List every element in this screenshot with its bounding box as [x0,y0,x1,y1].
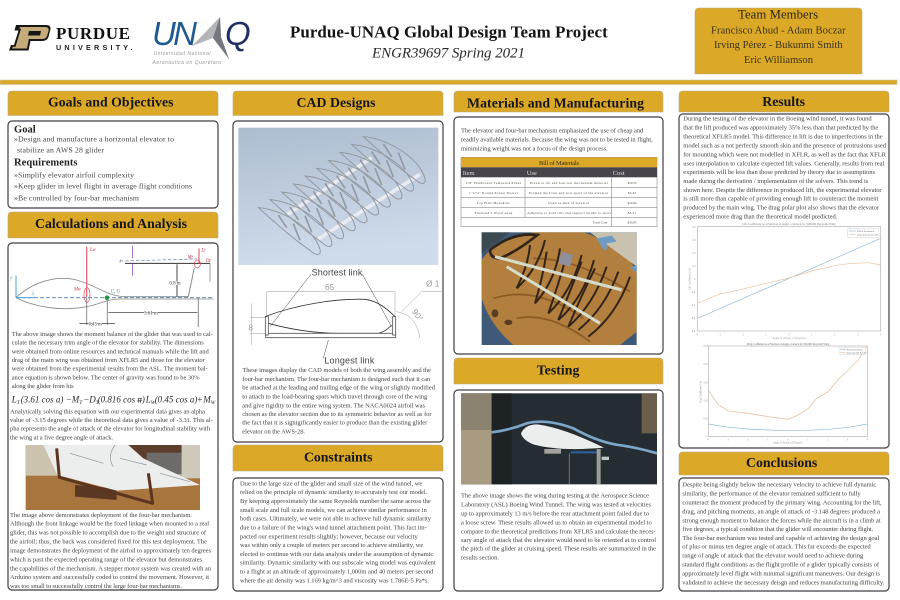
chart: lift coefficient vs angle of attack: 0.6 [692,239,696,242]
chart: drag coefficient vs angle of attack: Drag Coefficient as a Function of Angle of Attack for 500,000 Reynolds Wing [747,342,830,347]
text: testing description [461,493,656,562]
chart: lift coefficient vs angle of attack: -0.4 [691,304,696,307]
text: four-bar deployment description [10,512,212,590]
equation: T [96,400,100,406]
text: conclusions description: five degrees, a typical condition that the glider will encounter during flight. [682,526,874,533]
text: constraints description: elected to continue with our data analysis under the assumption of dynamic [240,551,433,558]
diagram: glider moment balance: Lw [89,248,97,253]
text: results description: that the lift produced was approximately 35% less than that predicted by the [683,125,878,132]
heading: materials and manufacturing: Materials and Manufacturing [467,96,644,110]
diagram: glider moment balance: x̂ [31,292,35,297]
equation: M [71,394,80,404]
text: CAD description: These images display the CAD models of both the wing assembly and the [242,367,431,374]
logo: UNAQ: UN [152,15,197,52]
heading: calculations and analysis: Calculations and Analysis [35,216,188,231]
text: constraints description [240,480,436,585]
text: results description: produced by the main wing. The drag polar plot also shows that the elevator [683,205,880,212]
chart: drag coefficient vs angle of attack: XFLR Prediction [847,349,864,352]
text: constraints description: By keeping approximately the same Reynolds number the same across the [240,498,431,505]
text: four-bar deployment description: image demonstrates the deployment of the airfoil to approximately ten degrees [10,547,211,554]
chart: lift coefficient vs angle of attack: 1 [811,333,813,336]
chart: lift coefficient vs angle of attack: 0.8 [692,226,696,229]
text: results description: is still more than capable of providing enough lift to counteract the moment [683,196,878,203]
chart: lift coefficient vs angle of attack: -4 [696,333,699,336]
text: results description: shown here. Despite the difference in produced lift, the experimental elevator [683,187,882,194]
panel: goals [8,121,218,208]
text: testing description: The above image shows the wing during testing at the Aerospace Science [461,493,649,500]
panel: team members [695,8,862,74]
heading: CAD designs [233,91,443,116]
diagram: glider moment balance: Lt [200,249,206,254]
text: constraints description: to a flight at an altitude of approximately 1,000m and 40 meters per second [240,569,434,576]
text: moment balance description [12,331,213,390]
text: conclusions description: counteract the moment produced by the primary wing. Accounting for the lift, [682,499,882,506]
table: bill of materials: Elevator rib and four-bar mechanism material [530,181,608,185]
requirements list: »Be controlled by four-bar mechanism [14,194,139,202]
chart: drag coefficient vs angle of attack: -2 [747,439,750,442]
text: constraints description: small scale and full scale models, we can achieve similar performance in [240,507,427,514]
chart: lift coefficient vs angle of attack: Angle of Attack, α (Degrees) [772,337,806,340]
diagram: glider moment balance: ŷ [9,277,13,282]
text: testing description: Laboratory (ASL) Boeing Wind Tunnel. The wing was tested at velocities [461,502,651,509]
text: four-bar deployment description: glider, this was not possible to accomplish due to the weight and structure of [10,530,207,537]
chart: drag coefficient vs angle of attack: Drag Coefficient (Cd) [700,381,703,403]
panel: results [679,114,889,448]
text: testing description: compare to the theoretical predictions from XFLR5 and calculate the neces- [461,528,656,535]
text: conclusions description: drag, and pitching moments, an angle of attack of -3.148 degrees produced a [682,508,880,515]
chart: lift coefficient vs angle of attack: -0.8 [691,330,696,333]
chart: drag coefficient vs angle of attack [700,342,869,445]
chart: drag coefficient vs angle of attack: 0.03 [704,381,709,384]
table: bill of materials [461,157,657,227]
text: conclusions description: of plus or minus ten degree angle of attack. This far exceeds the expected [682,544,871,551]
photo: four-bar mechanism deployed [26,445,200,510]
chart: lift coefficient vs angle of attack: 2 [834,333,836,336]
requirements list [14,170,192,202]
text: results description: model such as a not perfectly smooth skin and the presence of protrusions used [683,143,887,150]
text: four-bar deployment description: was too small to successfully control the large four-bar mechanisms. [10,583,182,590]
diagram: glider moment balance [9,246,213,327]
image: four-bar mechanism drawing: 65 [325,282,335,292]
diagram: glider moment balance: 3.61 m [144,312,158,317]
text: CAD description: be attached at the leading and trailing edge of the wing or slightly modified [242,385,436,392]
chart: lift coefficient vs angle of attack: XFLR Prediction [857,230,875,233]
diagram: glider moment balance: 0.8 m [169,281,181,286]
text: materials description: readily available materials. Because the wing was not to be tested in flight, [461,136,653,143]
table: bill of materials: Item [463,170,475,177]
table: bill of materials: $5.31 [628,211,636,215]
heading: results: Results [762,94,806,109]
text: testing description: up to approximately 13 m/s before the rear attachment point failed due to [461,511,649,518]
heading: conclusions: Conclusions [746,455,818,470]
chart: lift coefficient vs angle of attack: Lift Coefficient as a Function of Angle of Attack for 500,000 Reynolds Wing [742,222,836,227]
requirements heading: Requirements [14,158,78,168]
chart: lift coefficient vs angle of attack: 4 [880,333,882,336]
text: analytical solution: value of -3.15 degrees while the theoretical data gives a value of -3.31. This al- [10,417,213,424]
equation: W [211,400,216,406]
chart: lift coefficient vs angle of attack: -1 [764,333,767,336]
text: constraints description: pacted our experiment results slightly; however, because our velocity [240,533,418,540]
table: bill of materials: 1"x72" Round Poplar Dowel [469,191,518,195]
text: CAD description: four-bar mechanism. The four-bar mechanism is designed such that it can [242,376,431,383]
panel: conclusions [679,478,889,591]
logo: UNAQ: Q [225,15,251,52]
text: moment balance description: drag of the main wing was obtained from XFLR5 and those for the elevator [12,357,206,364]
goal text: stabilize an AWS 28 glider [17,146,104,154]
text: constraints description: similarity. Dynamic similarity with our subscale wing model was equivalent [240,560,436,567]
image: four-bar mechanism drawing: 8 [248,323,253,333]
table: bill of materials: Used as skin of elevator [548,201,590,205]
text: constraints description: relied on the principle of dynamic similarity to accurately test our model. [240,489,428,496]
equation: T [17,400,21,406]
logo: UNAQ: Universidad Nacional [154,51,211,57]
equation: + [197,394,203,404]
equation: W [151,400,156,406]
table: bill of materials: Top Flite Monokote [477,201,510,205]
equation: − [66,394,72,404]
chart: drag coefficient vs angle of attack: 1 [807,439,809,442]
chart: drag coefficient vs angle of attack: 0.04 [704,363,709,366]
heading: results [679,91,889,112]
text: conclusions description [682,482,885,586]
image: four-bar mechanism drawing: Shortest link [312,268,363,278]
text: results description: experiments will be less than those predicted by theory due to assumptions [683,169,875,176]
table: bill of materials: Adhesive to hold ribs and support beams to spars [527,211,612,215]
panel: team members: Eric Williamson [744,55,814,66]
heading: testing [454,358,663,384]
requirements list: »Keep glider in level flight in average flight conditions [14,182,192,190]
text: results description: experienced more drag than the theoretical model predicted. [683,213,838,220]
text: four-bar deployment description: Arduino system and successfully coded to control the movement. However, it [10,574,209,581]
table: bill of materials: Total Cost [593,220,607,224]
panel: materials and manufacturing [454,117,663,354]
image: four-bar mechanism drawing: Longest link [324,355,375,365]
heading: goals and objectives: Goals and Objectives [48,94,174,110]
requirements list: »Simplify elevator airfoil complexity [14,170,134,180]
chart: lift coefficient vs angle of attack: 0.2 [692,265,696,268]
logo: UNAQ [152,15,251,66]
logo: Purdue University: PURDUE [56,24,130,43]
image: four-bar mechanism drawing [248,268,442,365]
header: logos and title [9,15,608,66]
subtitle: ENGR39697 Spring 2021 [371,46,525,62]
text: conclusions description: validated to achieve the necessary deisgn and reduces manufacturing difficulty. [682,579,885,586]
text: materials description: minimizing weight was not a focus of the design process. [461,145,608,152]
text: results description: made during the derivation / implementation of the solvers. This trend is [683,178,869,185]
text: moment balance description: were obtained from the experimental results from the ASL. The moment bal- [12,366,208,373]
heading: testing: Testing [537,362,579,378]
heading: conclusions [679,452,889,475]
text: testing description: a loose screw. These results allowed us to obtain an experimental model to [461,519,652,526]
image: wing assembly CAD model [238,128,438,265]
heading: CAD designs: CAD Designs [296,95,376,110]
text: four-bar deployment description: the capabilities of the mechanism. A stepper motor system was created with an [10,565,212,572]
text: results description [683,116,887,220]
chart: lift coefficient vs angle of attack: -3 [719,333,722,336]
chart: drag coefficient vs angle of attack: 0.05 [704,345,709,348]
text: moment balance description: along the glider from his [12,383,74,390]
text: conclusions description: similarity, the performance of the elevator remained sufficient to fully [682,491,861,498]
text: results description: During the testing of the elevator in the Boeing wind tunnel, it was found [683,116,872,123]
goal text: »Design and manufacture a horizontal elevator to [14,134,174,144]
diagram: glider moment balance: Mt [187,255,194,260]
panel: testing [454,390,663,591]
text: materials description [461,128,653,152]
diagram: glider moment balance: i [119,259,121,264]
text: results description: for mounting which were not modelled in XFLR, as well as the fact that XFLR [683,151,887,158]
chart: lift coefficient vs angle of attack: Lift Coefficient (Cl) [688,268,691,290]
text: four-bar deployment description: Although the front linkage would be the fixed linkage when mounted to a real [10,521,209,528]
heading: constraints: Constraints [304,450,373,464]
chart: lift coefficient vs angle of attack: 0.4 [692,252,696,255]
table: bill of materials: Formed the front and rear spars of the elevator [529,191,609,195]
text: CAD description: elevator on the AWS-28. [242,428,305,435]
text: testing description: sary angle of attack that the elevator would need to be oriented at to control [461,537,656,544]
table: bill of materials: $10.33 [628,181,637,185]
chart: drag coefficient vs angle of attack: 4 [867,439,869,442]
text: CAD description [242,367,436,435]
panel: constraints [233,478,443,591]
chart: drag coefficient vs angle of attack: Experimental Results [847,352,867,355]
diagram: glider moment balance: Mw [73,288,82,293]
table: bill of materials: Bill of Materials [539,160,579,167]
text: four-bar deployment description: the airfoil; thus, the back was considered fixed for this test deployment. The [10,538,207,545]
text: moment balance description: culate the necessary trim angle of the elevator for stability. The dimensions [12,340,204,347]
gold divider bar [0,80,897,84]
table: bill of materials: Use [527,170,537,177]
table: bill of materials: $5.32 [628,191,636,195]
logo: Purdue University: UNIVERSITY. [56,43,132,52]
image: four-bar mechanism drawing: Ø 1 [426,279,440,289]
equation: T [79,400,83,406]
text: moment balance description: were obtained from online resources and technical manuals while the lift and [12,348,209,355]
text: results description: theoretical XFLR5 model. This difference in lift is due to imperfections in the [683,134,883,141]
chart: drag coefficient vs angle of attack: -4 [707,439,710,442]
text: testing description: results section. [461,555,499,562]
chart: drag coefficient vs angle of attack: -3 [727,439,730,442]
text: CAD description: and give rigidity to the entire wing system. The NACA0024 airfoil was [242,402,425,409]
table: bill of materials: Titebond 3 Wood Glue [474,211,513,215]
text: conclusions description: standard flight conditions as the flight profile of a glider typically consists of [682,561,880,568]
photo: assembled ribs on table [482,232,637,345]
equation: (3.61 cos a) [21,394,63,404]
text: conclusions description: strong enough moment to balance the forces while the aircraft is in a climb at [682,517,881,524]
diagram: glider moment balance: Dt [205,259,211,264]
chart: drag coefficient vs angle of attack: 2 [827,439,829,442]
text: constraints description: both cases. Ultimately, we were not able to achieve full dynamic similarity [240,516,432,523]
chart: lift coefficient vs angle of attack: -0.6 [691,317,696,320]
text: CAD description: to attach to the load-bearing spars which travel through core of the wing [242,393,428,400]
table: bill of materials: $35.95 [628,220,637,224]
panel: CAD designs [233,121,443,442]
logo: UNAQ: Aeronáutica en Querétaro [152,60,221,66]
heading: goals and objectives [8,91,218,116]
text: CAD description: the fact that it is signigificantly easier to produce than the existing glider [242,420,428,427]
table: bill of materials: 1/8" Hardboard Tempered Panel [466,181,521,185]
text: constraints description: where the air density was 1.169 kg/m^3 and viscosity was 1.786E-5 Pa*s. [240,578,429,585]
diagram: glider moment balance: 0.45 m [89,322,102,327]
text: analytical solution: the wing at a five degree angle of attack. [10,434,113,441]
panel: team members: Francisco Abud - Adam Boczar [711,26,846,36]
text: analytical solution: Analytically solving this equation with our experimental data gives an alpha [10,408,205,415]
text: constraints description: Due to the large size of the glider and small size of the wind tunnel, we [240,480,422,487]
text: constraints description: was within only a couple of meters per second to achieve similarity, we [240,542,423,549]
diagram: glider moment balance: C, G [111,289,120,294]
chart: lift coefficient vs angle of attack: 3 [857,333,859,336]
text: conclusions description: The four-bar mechanism was tested and capable of achieving the design goal [682,535,879,542]
text: analytical solution [10,408,213,441]
text: analytical solution: pha represents the angle of attack of the elevator for longitudinal stability with [10,426,211,433]
chart: drag coefficient vs angle of attack: Angle of Attack, α (Degrees) [773,442,802,445]
chart: lift coefficient vs angle of attack: Experimental Results [857,234,878,237]
panel: team members: Team Members [738,8,818,22]
goal text [14,134,174,154]
text: CAD description: chosen as the elevator section due to its symmetric behavior as well as for [242,411,432,418]
equation: (0.816 cos a) [98,394,145,404]
chart: lift coefficient vs angle of attack [688,222,882,340]
heading: calculations and analysis [8,212,218,238]
heading: constraints [233,445,443,471]
chart: lift coefficient vs angle of attack: 0 [694,278,696,281]
text: four-bar deployment description: The image above demonstrates deployment of the four-bar mechanism. [10,512,192,519]
table: bill of materials: Cost [613,170,625,177]
chart: lift coefficient vs angle of attack: 0 [788,333,790,336]
text: four-bar deployment description: which is past the expected operating range of the elevator but demonstrates [10,556,202,563]
text: results description: uses interpolation to calculate expected lift values. Generally, results from real [683,160,884,167]
text: constraints description: due to a failure of the wing's wind tunnel attachment point. This fact im- [240,525,427,532]
chart: drag coefficient vs angle of attack: 0 [706,436,708,439]
image: four-bar mechanism drawing: 90° [410,307,425,323]
chart: drag coefficient vs angle of attack: 0.02 [704,399,709,402]
logo: Purdue University [9,24,132,52]
equation: M [202,394,211,404]
photo: wing in wind tunnel [461,393,657,484]
equation: L [145,394,151,404]
goal heading: Goal [14,124,36,136]
text: moment balance description: The above image shows the moment balance of the glider that was used to cal- [12,331,213,338]
chart: lift coefficient vs angle of attack: -0.2 [691,291,696,294]
text: conclusions description: Despite being slightly below the necessary velocity to achieve full dynamic [682,482,876,489]
equation: D [88,394,96,404]
equation: = [137,394,143,404]
table: bill of materials: $14.99 [628,201,637,205]
text: conclusions description: range of angle of attack that the elevator would need to achieve during [682,553,864,560]
chart: lift coefficient vs angle of attack: -2 [742,333,745,336]
chart: drag coefficient vs angle of attack: 0.01 [704,418,709,421]
equation: (0.45 cos a) [155,394,197,404]
equation: L [11,394,17,404]
equation: − [83,394,89,404]
heading: materials and manufacturing [454,91,663,112]
title: Purdue-UNAQ Global Design Team Project [290,22,608,42]
chart: drag coefficient vs angle of attack: -1 [766,439,769,442]
text: testing description: the pitch of the glider at cruising speed. These results are summarized in the [461,546,656,553]
text: materials description: The elevator and four-bar mechanism emphasized the use of cheap and [461,128,644,135]
panel: team members: Irving Pérez - Bukunmi Smith [714,40,843,51]
chart: drag coefficient vs angle of attack: 0 [787,439,789,442]
chart: drag coefficient vs angle of attack: 3 [847,439,849,442]
text: moment balance description: ance equation is shown below. The center of gravity was found to be 30% [12,374,200,381]
panel: calculations and analysis [8,243,218,590]
text: conclusions description: approximately level flight with minimal significant maneuvers. Our design is [682,570,880,577]
